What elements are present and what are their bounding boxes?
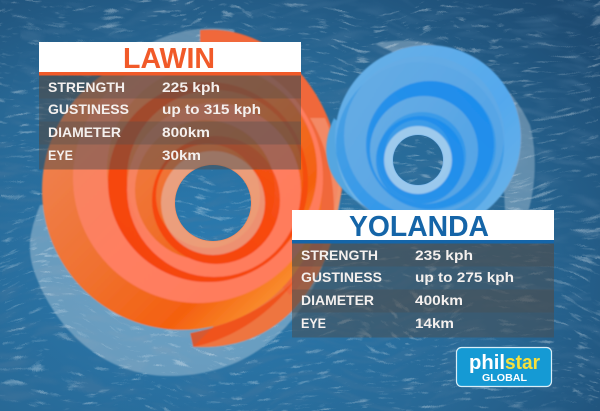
stats: Lawin: 800km bbox=[162, 124, 210, 140]
stats: Lawin: up to 315 kph bbox=[162, 101, 261, 117]
typhoon swirl: Lawin bbox=[30, 28, 345, 376]
stats: Lawin: EYE bbox=[48, 147, 73, 163]
panel: Lawin bbox=[39, 42, 301, 170]
logo: philstar GLOBAL bbox=[456, 348, 552, 386]
stats: Yolanda: up to 275 kph bbox=[415, 269, 514, 285]
stats: Yolanda bbox=[301, 247, 514, 331]
logo: philstar GLOBAL: star bbox=[505, 352, 540, 374]
stats: Lawin: STRENGTH bbox=[48, 79, 125, 95]
stats: Yolanda: STRENGTH bbox=[301, 247, 378, 263]
stats: Lawin bbox=[48, 79, 261, 163]
stats: Yolanda: DIAMETER bbox=[301, 292, 374, 308]
stats: Yolanda: EYE bbox=[301, 315, 326, 331]
stats: Lawin: GUSTINESS bbox=[48, 101, 129, 117]
stats: Yolanda: 235 kph bbox=[415, 247, 473, 263]
stats: Lawin: DIAMETER bbox=[48, 124, 121, 140]
stats: Yolanda: 400km bbox=[415, 292, 463, 308]
pale outer band bbox=[375, 41, 535, 212]
heading: Lawin: LAWIN bbox=[123, 43, 215, 75]
pale outer band bbox=[30, 200, 332, 376]
typhoon swirl: Yolanda bbox=[326, 41, 535, 231]
stats: Lawin: 30km bbox=[162, 147, 201, 163]
logo: philstar GLOBAL: GLOBAL bbox=[482, 373, 527, 384]
logo: philstar GLOBAL: phil bbox=[469, 352, 505, 374]
panel: Yolanda bbox=[292, 210, 554, 338]
stats: Yolanda: 14km bbox=[415, 315, 454, 331]
stats: Yolanda: GUSTINESS bbox=[301, 269, 382, 285]
stats: Lawin: 225 kph bbox=[162, 79, 220, 95]
heading: Yolanda: YOLANDA bbox=[349, 211, 489, 243]
